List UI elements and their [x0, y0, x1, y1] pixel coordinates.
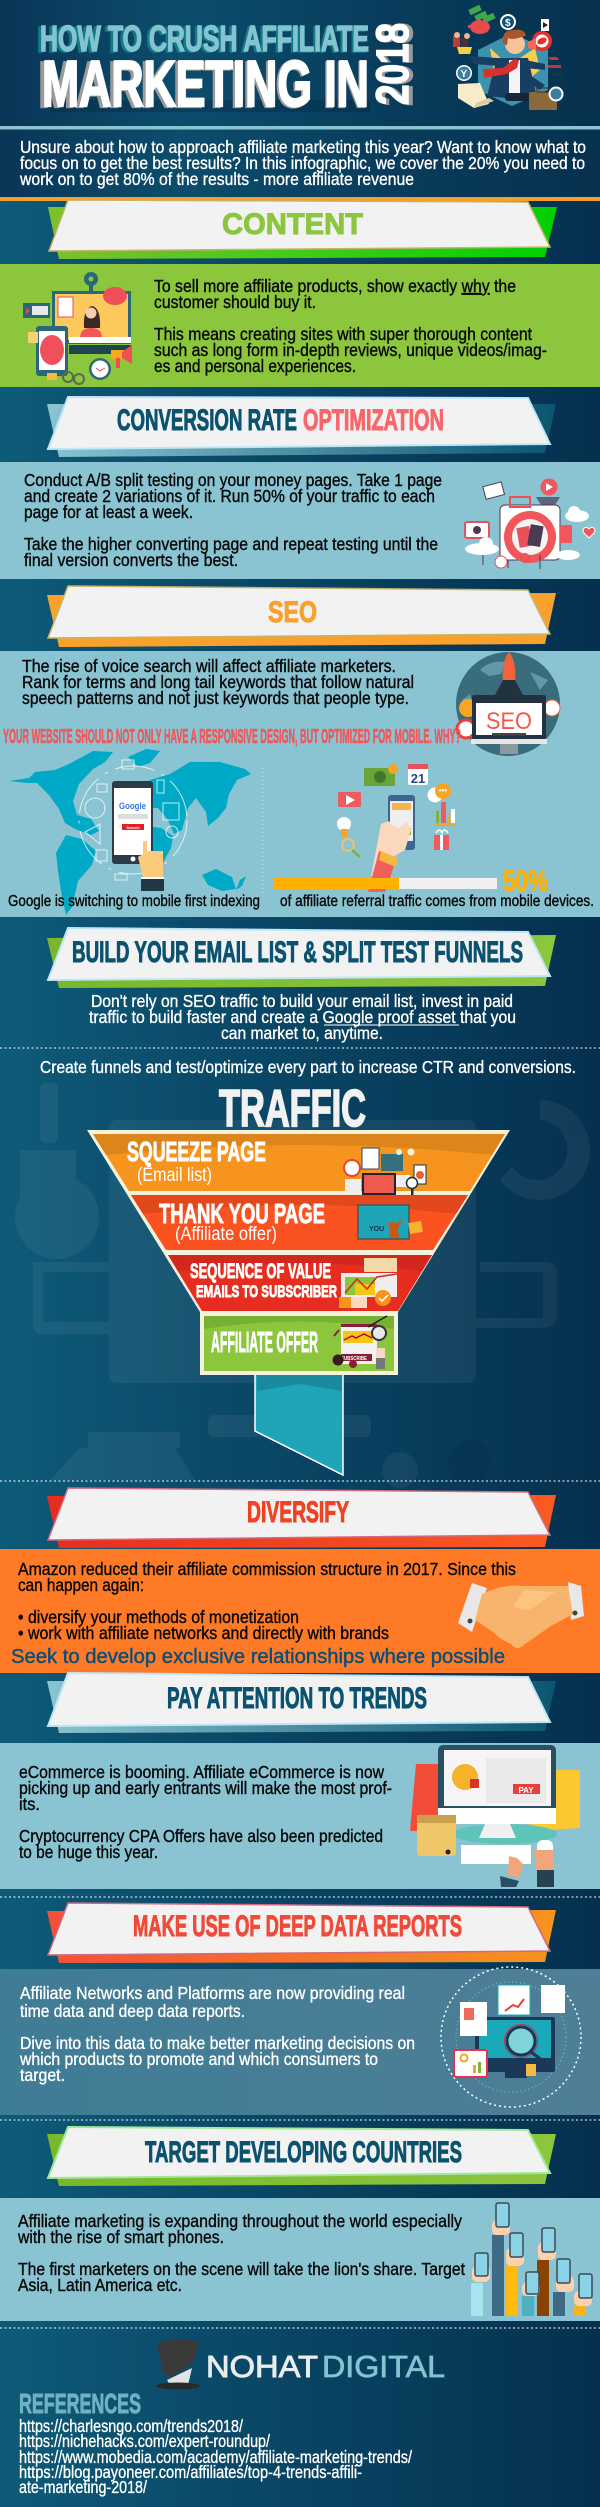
title line 1: HOW TO CRUSH AFFILIATE	[37, 19, 367, 60]
title year rotated: 2018	[367, 23, 418, 105]
logo: nohat digital	[156, 2339, 445, 2390]
icon: seo monitor: SEO	[486, 708, 532, 735]
conversion text: Conduct A/B split testing on your money pages. Take 1 page	[24, 470, 442, 490]
progress bar 50%: 50%	[503, 865, 548, 898]
section heading: conversion rate optimization: CONVERSION RATE	[117, 404, 297, 437]
trends text: to be huge this year.	[19, 1842, 158, 1862]
seo text: speech patterns and not just keywords that people type.	[22, 688, 409, 708]
icon: multitasking businessman: Y	[460, 69, 468, 80]
panel: conversion rate	[0, 462, 600, 579]
funnel layer: sequence of value: SEQUENCE OF VALUE	[190, 1260, 331, 1283]
section heading: diversify: DIVERSIFY	[247, 1496, 349, 1529]
caption left: Google is switching to mobile first indexing	[8, 893, 260, 910]
trends text: its.	[19, 1794, 40, 1814]
content text: customer should buy it.	[154, 292, 316, 312]
phone	[112, 781, 153, 864]
icon: rising chart	[339, 1258, 397, 1308]
icon: multitasking businessman: $	[505, 18, 511, 29]
mobile icons: •••	[439, 786, 447, 795]
mobile icons: 21	[411, 771, 425, 786]
funnel layer: affiliate offer	[204, 1316, 394, 1371]
hand	[138, 841, 163, 877]
panel: seo	[0, 651, 600, 917]
world map with phone: Google	[119, 801, 146, 811]
title line 2: MARKETING IN	[38, 48, 368, 121]
panel: diversify	[0, 1549, 600, 1673]
section heading: seo: SEO	[268, 596, 317, 629]
section heading: conversion rate optimization	[47, 397, 556, 457]
header	[0, 0, 600, 197]
body	[487, 58, 537, 100]
funnel tail	[255, 1374, 343, 1475]
icon: testing machine	[465, 478, 595, 569]
deep data text: Dive into this data to make better marketing decisions on	[20, 2033, 415, 2053]
section heading: pay attention to trends: PAY ATTENTION TO TRENDS	[167, 1682, 427, 1715]
icon: thank you screen: YOU	[369, 1226, 384, 1233]
section heading: email list	[47, 928, 556, 988]
panel: content	[0, 264, 600, 387]
deep data text	[19, 1983, 415, 2085]
icon: thank you screen	[358, 1205, 423, 1239]
countries text: The first marketers on the scene will take the lion's share. Target	[18, 2259, 465, 2279]
section heading: diversify	[47, 1488, 556, 1548]
world map with phone	[9, 749, 251, 915]
title line 2	[38, 47, 370, 121]
icon: content devices	[23, 272, 132, 384]
funnel layer: affiliate offer: AFFILIATE OFFER	[211, 1327, 318, 1359]
icon: data dashboard	[441, 1967, 581, 2107]
band divider	[0, 126, 600, 130]
icon: offer report: SUBSCRIBE	[341, 1356, 367, 1362]
deep data text: target.	[20, 2065, 65, 2085]
title line 1	[37, 18, 369, 60]
section heading: conversion rate optimization: OPTIMIZATION	[303, 404, 444, 437]
funnel layer: squeeze page: (Email list)	[137, 1165, 212, 1186]
seo text: Rank for terms and long tail keywords that follow natural	[22, 672, 414, 692]
traffic heading: TRAFFIC	[219, 1080, 366, 1138]
money	[468, 5, 496, 23]
intro paragraph: work on to get 80% of the results - more affiliate revenue	[19, 169, 414, 189]
funnel layer: thank you page: THANK YOU PAGE	[159, 1198, 325, 1229]
deep data text: which products to promote and which consumers to	[19, 2049, 378, 2069]
title line 2: MARKETING IN	[42, 47, 369, 120]
conversion text: and create 2 variations of it. Run 50% of your traffic to each	[24, 486, 435, 506]
intro paragraph	[19, 137, 586, 189]
funnel layer: sequence of value	[168, 1255, 432, 1311]
divider dotted vertical	[262, 768, 264, 895]
content text: This means creating sites with super thorough content	[154, 324, 532, 344]
section heading: content	[48, 200, 557, 259]
email paragraph: traffic to build faster and create a Google proof asset that you	[89, 1007, 516, 1027]
orange divider	[0, 197, 600, 201]
faint background pictograms	[15, 1083, 590, 1488]
section heading: pay attention to trends	[47, 1673, 556, 1733]
trends text: Cryptocurrency CPA Offers have also been predicted	[19, 1826, 383, 1846]
icon: handshake	[458, 1582, 584, 1648]
icon: analytics devices	[344, 1148, 426, 1197]
conversion text: Take the higher converting page and repeat testing until the	[24, 534, 438, 554]
funnel layer: sequence of value: EMAILS TO SUBSCRIBER	[196, 1282, 337, 1301]
countries text	[17, 2211, 465, 2295]
icon: hat	[156, 2339, 200, 2390]
logo: nohat digital: DIGITAL	[322, 2349, 445, 2384]
section heading: target developing countries	[47, 2127, 556, 2186]
section heading: seo	[47, 586, 556, 647]
dark gears	[447, 1440, 491, 1484]
diversify text: • work with affiliate networks and directly with brands	[18, 1623, 389, 1643]
references list: https://charlesngo.com/trends2018/	[19, 2416, 243, 2436]
funnel layer: thank you page	[131, 1195, 468, 1250]
panel: deep data	[0, 1967, 600, 2115]
section heading: content: CONTENT	[222, 208, 363, 241]
references list: https://nichehacks.com/expert-roundup/	[19, 2431, 270, 2451]
email paragraph: can market to, anytime.	[221, 1023, 383, 1043]
icon: seo monitor	[456, 652, 560, 756]
countries text: Asia, Latin America etc.	[18, 2275, 182, 2295]
trends text	[19, 1762, 392, 1862]
deep data text: Affiliate Networks and Platforms are now providing real	[20, 1983, 405, 2003]
references list: https://www.mobedia.com/academy/affiliate-marketing-trends/	[19, 2447, 412, 2467]
icon: ecommerce desktop	[410, 1745, 580, 1887]
trends text: eCommerce is booming. Affiliate eCommerce is now	[19, 1762, 384, 1782]
diversify text: can happen again:	[18, 1575, 144, 1595]
icon: ecommerce desktop: PAY	[518, 1786, 534, 1795]
funnel layer: thank you page: (Affiliate offer)	[175, 1224, 277, 1245]
seo text	[22, 656, 414, 708]
mobile icons	[337, 764, 456, 892]
panel: trends	[0, 1743, 600, 1889]
conversion text	[24, 470, 442, 570]
references heading: REFERENCES	[19, 2388, 141, 2419]
countries text: Affiliate marketing is expanding throughout the world especially	[18, 2211, 462, 2231]
references list: https://blog.payoneer.com/affiliates/top-4-trends-affili-	[19, 2462, 362, 2482]
callout: exclusive relationships: Seek to develop exclusive relationships where possible	[11, 1646, 505, 1668]
funnel layer: squeeze page	[93, 1134, 505, 1197]
references list: ate-marketing-2018/	[19, 2477, 147, 2497]
email paragraph	[89, 991, 516, 1043]
panel: developing countries	[0, 2198, 600, 2321]
email paragraph: Don't rely on SEO traffic to build your email list, invest in paid	[91, 991, 513, 1011]
content text: es and personal experiences.	[154, 356, 356, 376]
countries text: with the rise of smart phones.	[17, 2227, 224, 2247]
content text: To sell more affiliate products, show exactly why the	[154, 276, 516, 296]
logo: nohat digital: NOHAT	[206, 2349, 318, 2384]
diversify text	[18, 1559, 516, 1643]
funnel chart	[87, 1130, 510, 1475]
world map with phone: Search	[126, 825, 140, 830]
icon: raised hands with phones	[471, 2203, 592, 2316]
content text: such as long form in-depth reviews, unique videos/imag-	[154, 340, 547, 360]
title line 1: HOW TO CRUSH AFFILIATE	[40, 18, 369, 59]
funnel layer: squeeze page: SQUEEZE PAGE	[127, 1136, 266, 1167]
deep data text: time data and deep data reports.	[20, 2001, 245, 2021]
progress bar 50%	[273, 865, 548, 898]
content text	[154, 276, 547, 376]
title year rotated: 2018	[369, 23, 422, 106]
conversion text: page for at least a week.	[24, 502, 193, 522]
trends text: picking up and early entrants will make the most prof-	[19, 1778, 392, 1798]
diversify text: • diversify your methods of monetization	[18, 1607, 299, 1627]
conversion text: final version converts the best.	[24, 550, 238, 570]
laptop	[458, 83, 489, 108]
seo text: The rise of voice search will affect affiliate marketers.	[22, 656, 396, 676]
section heading: deep data reports	[47, 1903, 556, 1963]
references list	[19, 2416, 412, 2497]
icon: multitasking businessman	[453, 5, 564, 110]
diversify text: Amazon reduced their affiliate commission structure in 2017. Since this	[18, 1559, 516, 1579]
icon: offer report	[332, 1316, 387, 1369]
